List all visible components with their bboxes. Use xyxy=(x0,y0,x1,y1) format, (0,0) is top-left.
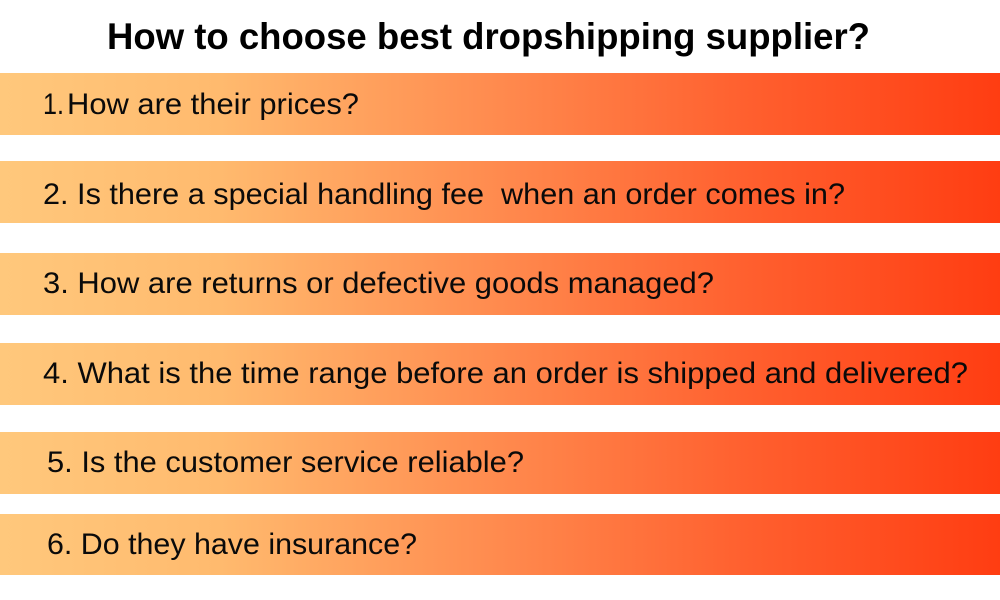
question bar 2 xyxy=(0,161,1000,223)
question bar 4: 4. What is the time range before an order is shipped and delivered? xyxy=(43,357,968,390)
title: How to choose best dropshipping supplier? xyxy=(107,16,870,57)
question bar 3: 3. How are returns or defective goods managed? xyxy=(43,267,714,300)
question bar 1: How are their prices? xyxy=(67,88,359,121)
question bar 2: 2. Is there a special handling fee when an order comes in? xyxy=(43,178,845,211)
question bar 5 xyxy=(0,432,1000,494)
question bar 3 xyxy=(0,253,1000,315)
question bar 4 xyxy=(0,343,1000,405)
question bar 5: 5. Is the customer service reliable? xyxy=(47,446,524,479)
question bar 6: 6. Do they have insurance? xyxy=(47,528,417,561)
question bar 1: 1. xyxy=(43,88,64,121)
question bar 6 xyxy=(0,514,1000,575)
question bar 1 xyxy=(0,73,1000,135)
